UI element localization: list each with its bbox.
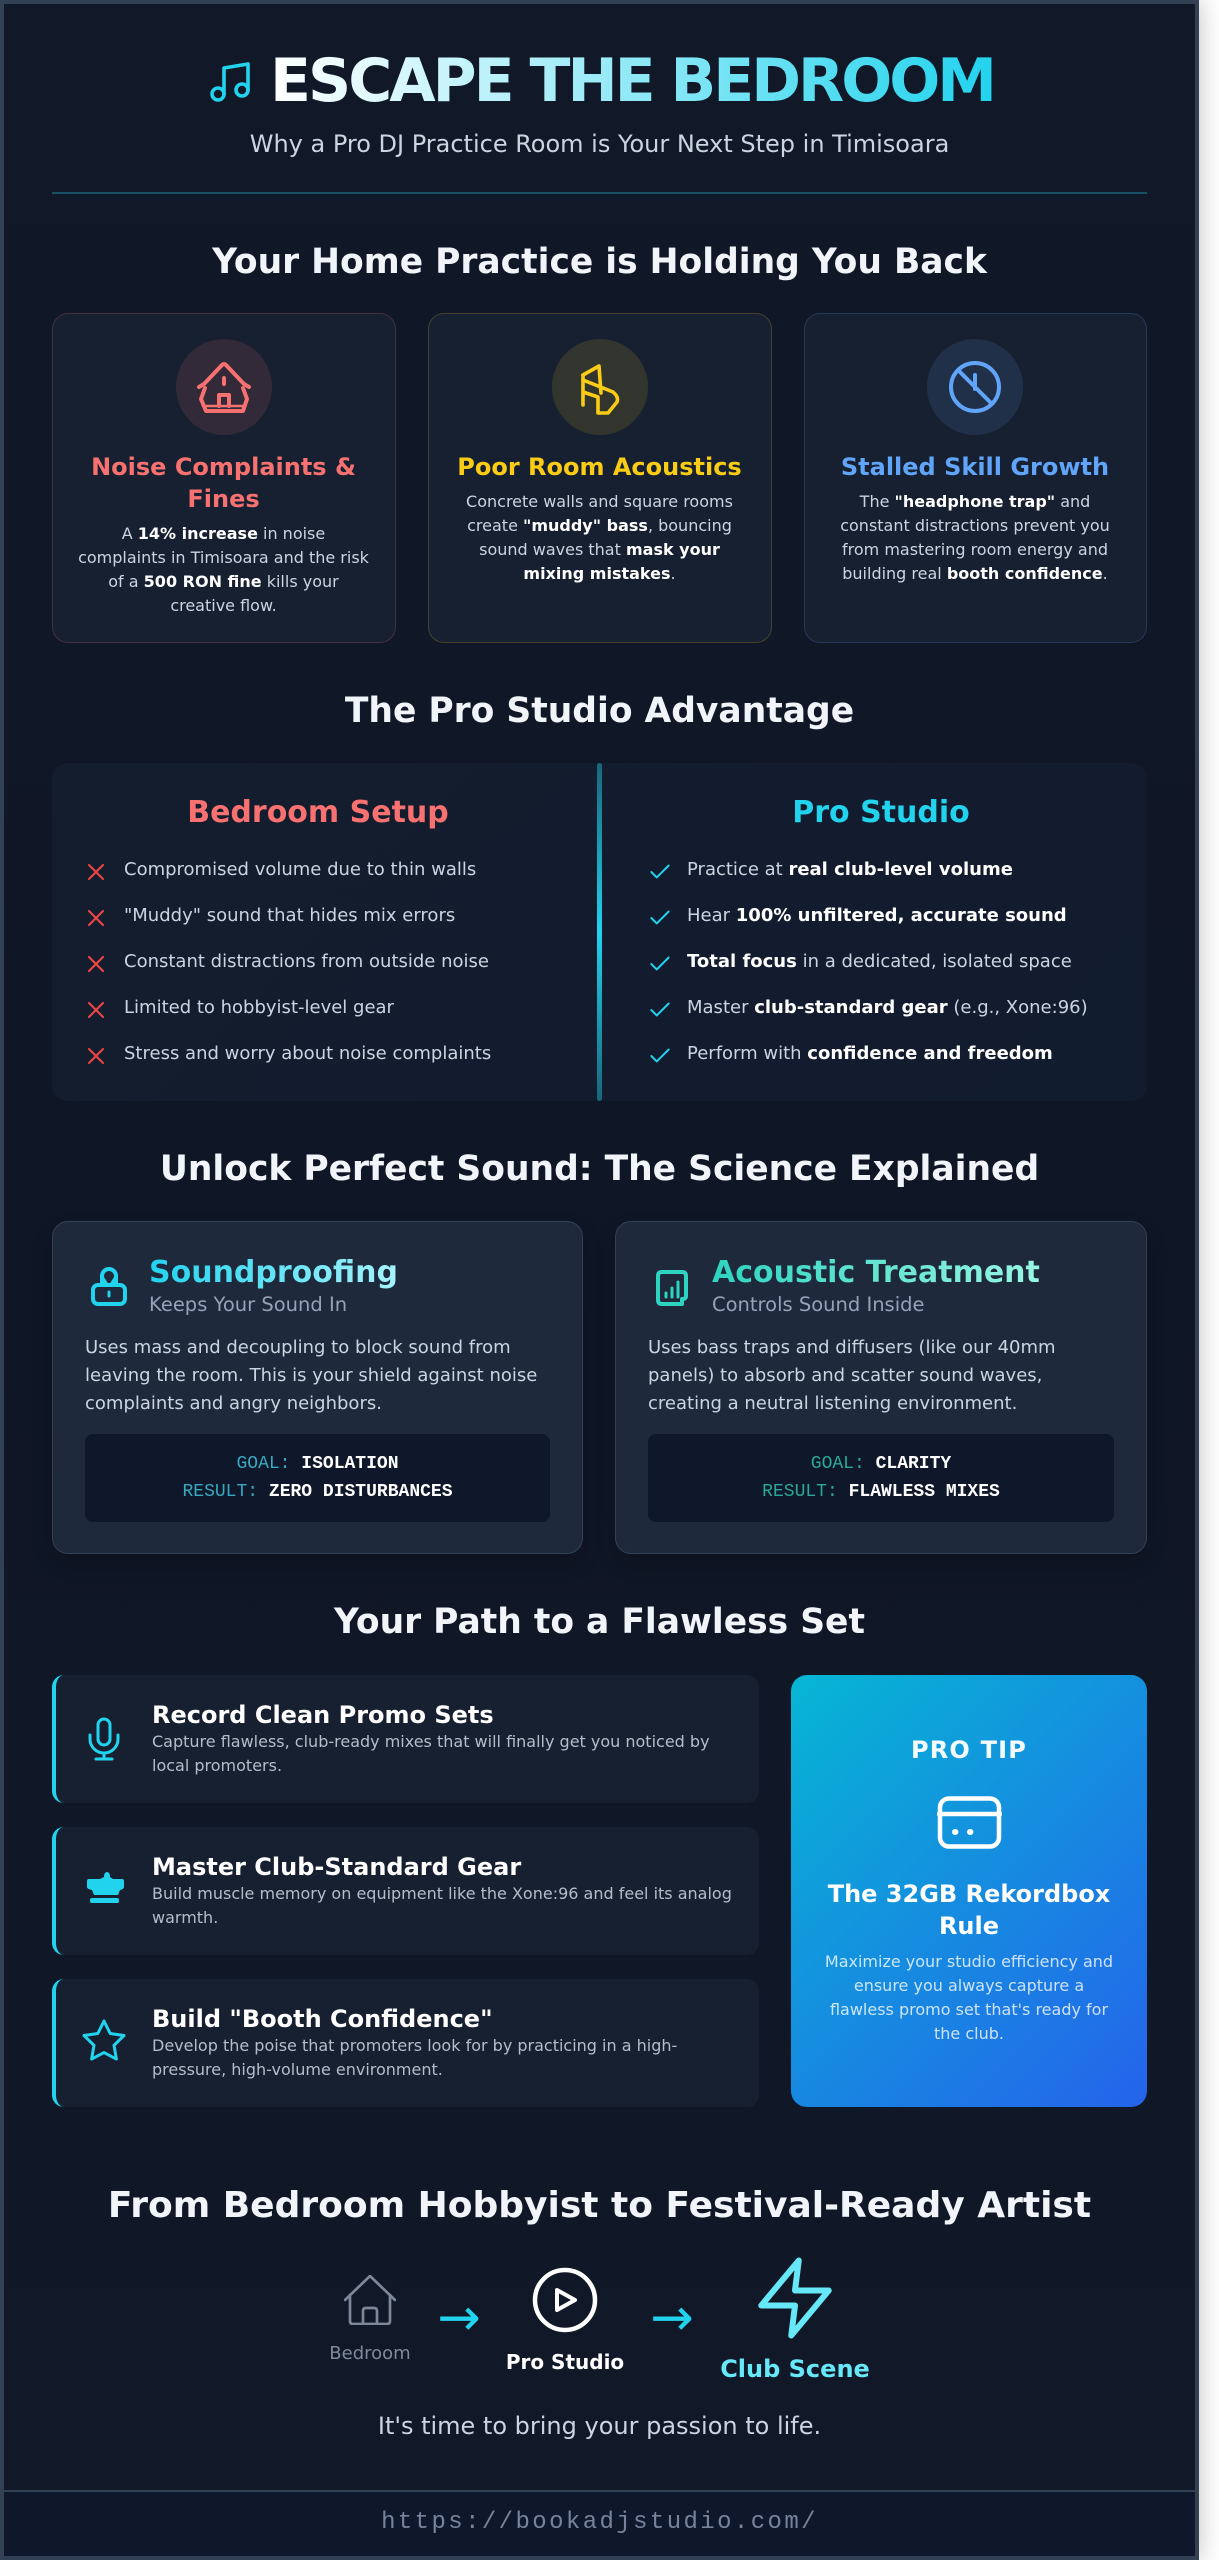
subtitle: Controls Sound Inside [712, 1293, 925, 1316]
arrow: → [650, 2288, 694, 2348]
title: Master Club-Standard Gear [152, 1853, 521, 1881]
footer: https://bookadjstudio.com/ [381, 2509, 818, 2536]
label: Pro Studio [506, 2350, 624, 2374]
icon: play circle [532, 2268, 598, 2332]
heading: home practice: Your Home Practice is Holding You Back [212, 242, 987, 282]
card text: A 14% increase in noise [122, 524, 325, 543]
description [648, 1337, 1056, 1414]
list: bedroom drawbacks [88, 858, 491, 1064]
card text: building real booth confidence. [842, 564, 1108, 583]
list: bedroom drawbacks: Limited to hobbyist-level gear [124, 996, 394, 1018]
tip text: ensure you always capture a [854, 1976, 1084, 1995]
card title: Stalled Skill Growth [841, 452, 1109, 480]
icon: prohibited [927, 339, 1023, 435]
subtitle: Keeps Your Sound In [149, 1293, 347, 1316]
tip title: The 32GB Rekordbox [828, 1880, 1110, 1908]
icon: music note [210, 62, 250, 102]
arrow: → [437, 2288, 481, 2348]
title: Soundproofing [149, 1255, 398, 1290]
tip text: the club. [934, 2024, 1004, 2043]
icon: cross [88, 1048, 104, 1064]
list: pro studio benefits: Hear 100% unfiltered, accurate sound [687, 904, 1067, 926]
icon: house [344, 2275, 396, 2325]
description: leaving the room. This is your shield against noise [85, 1365, 537, 1386]
goal box: RESULT: ZERO DISTURBANCES [182, 1482, 453, 1502]
list: pro studio benefits: Master club-standard gear (e.g., Xone:96) [687, 996, 1088, 1018]
panel: room acoustics [428, 313, 772, 643]
card title: Poor Room Acoustics [457, 452, 742, 480]
icon: check [650, 864, 670, 878]
card text: constant distractions prevent you [840, 516, 1110, 535]
label: PRO TIP [911, 1736, 1027, 1764]
icon: cross [88, 956, 104, 972]
icon: acoustic shape [552, 339, 648, 435]
goal box: GOAL: CLARITY [811, 1454, 951, 1474]
card text [840, 492, 1110, 583]
panel: pro tip [791, 1675, 1147, 2107]
card text: of a 500 RON fine kills your [108, 572, 339, 591]
description [152, 1884, 732, 1927]
column title: pro studio: Pro Studio [792, 795, 970, 830]
icon: memory card [937, 1796, 1002, 1849]
goal box: GOAL: ISOLATION [236, 1454, 399, 1474]
card text: complaints in Timisoara and the risk [78, 548, 369, 567]
icon: cross [88, 1002, 104, 1018]
tip text [825, 1952, 1113, 2043]
heading: advantage: The Pro Studio Advantage [345, 691, 854, 731]
heading: path: Your Path to a Flawless Set [334, 1602, 865, 1642]
list: bedroom drawbacks: Constant distractions from outside noise [124, 950, 489, 972]
divider glow [597, 763, 602, 1101]
title: Record Clean Promo Sets [152, 1701, 494, 1729]
heading: journey: From Bedroom Hobbyist to Festival-Ready Artist [108, 2185, 1091, 2226]
icon: acoustic panel [656, 1270, 688, 1306]
card title [91, 452, 356, 512]
panel: stalled growth [804, 313, 1147, 643]
list: pro studio benefits [650, 858, 1088, 1064]
label: Club Scene [720, 2355, 870, 2383]
card text [466, 492, 733, 583]
step: club scene [720, 2258, 870, 2383]
card text [78, 524, 369, 615]
description: panels) to absorb and scatter sound waves, [648, 1365, 1042, 1386]
tip text: flawless promo set that's ready for [830, 2000, 1108, 2019]
icon: gear cap [87, 1872, 124, 1903]
card text: sound waves that mask your [479, 540, 720, 559]
tagline: It's time to bring your passion to life. [378, 2412, 821, 2440]
panel: soundproofing [52, 1221, 583, 1554]
tip title [828, 1880, 1110, 1940]
label: Bedroom [329, 2343, 411, 2364]
flow diagram [329, 2258, 870, 2383]
description: creating a neutral listening environment. [648, 1393, 1017, 1414]
list: pro studio benefits: Perform with confidence and freedom [687, 1042, 1053, 1064]
icon: check [650, 1002, 670, 1016]
card text: mixing mistakes. [523, 564, 676, 583]
panel: comparison [52, 763, 1147, 1101]
goal box [85, 1434, 550, 1522]
card text: The "headphone trap" and [860, 492, 1090, 511]
panel: promo sets [52, 1675, 759, 1803]
card title: Noise Complaints & [91, 452, 356, 480]
title: Build "Booth Confidence" [152, 2005, 493, 2033]
list: bedroom drawbacks: Stress and worry about noise complaints [124, 1042, 491, 1064]
description: Capture flawless, club-ready mixes that will finally get you noticed by [152, 1732, 710, 1751]
title: ESCAPE THE BEDROOM [270, 46, 994, 116]
list: pro studio benefits: Practice at real club-level volume [687, 858, 1013, 880]
description: complaints and angry neighbors. [85, 1393, 382, 1414]
subtitle: Why a Pro DJ Practice Room is Your Next Step in Timisoara [250, 130, 949, 158]
description: warmth. [152, 1908, 218, 1927]
icon: check [650, 910, 670, 924]
step: bedroom [329, 2275, 411, 2364]
icon: cross [88, 910, 104, 926]
card text: Concrete walls and square rooms [466, 492, 733, 511]
description [152, 1732, 710, 1775]
icon: lock [91, 1267, 127, 1306]
description: pressure, high-volume environment. [152, 2060, 443, 2079]
panel: club gear [52, 1827, 759, 1955]
tip title: Rule [939, 1912, 999, 1940]
description: Uses bass traps and diffusers (like our 40mm [648, 1337, 1056, 1358]
title: Acoustic Treatment [712, 1255, 1040, 1290]
panel: acoustic treatment [615, 1221, 1147, 1554]
list: bedroom drawbacks: "Muddy" sound that hides mix errors [124, 904, 455, 926]
card text: creative flow. [170, 596, 277, 615]
heading: science: Unlock Perfect Sound: The Science Explained [160, 1149, 1039, 1189]
card text: create "muddy" bass, bouncing [467, 516, 732, 535]
goal box [648, 1434, 1114, 1522]
icon: cross [88, 864, 104, 880]
panel: noise complaints [52, 313, 396, 643]
list: pro studio benefits: Total focus in a dedicated, isolated space [687, 950, 1072, 972]
header [210, 46, 994, 158]
card title: Fines [187, 484, 260, 512]
description [85, 1337, 537, 1414]
description: Uses mass and decoupling to block sound from [85, 1337, 511, 1358]
panel: booth confidence [52, 1979, 759, 2107]
icon: lightning [758, 2258, 832, 2338]
description [152, 2036, 677, 2079]
goal box: RESULT: FLAWLESS MIXES [762, 1482, 1000, 1502]
list: bedroom drawbacks: Compromised volume due to thin walls [124, 858, 476, 880]
description: Build muscle memory on equipment like the Xone:96 and feel its analog [152, 1884, 732, 1903]
column title: bedroom: Bedroom Setup [187, 795, 449, 830]
icon: microphone [88, 1718, 120, 1760]
description: local promoters. [152, 1756, 282, 1775]
tip text: Maximize your studio efficiency and [825, 1952, 1113, 1971]
step: pro studio [506, 2268, 624, 2374]
footer [4, 2490, 1195, 2556]
icon: star [82, 2019, 126, 2061]
icon: house alert [176, 339, 272, 435]
description: Develop the poise that promoters look for by practicing in a high- [152, 2036, 677, 2055]
icon: check [650, 956, 670, 970]
card text: from mastering room energy and [842, 540, 1108, 559]
icon: check [650, 1048, 670, 1062]
